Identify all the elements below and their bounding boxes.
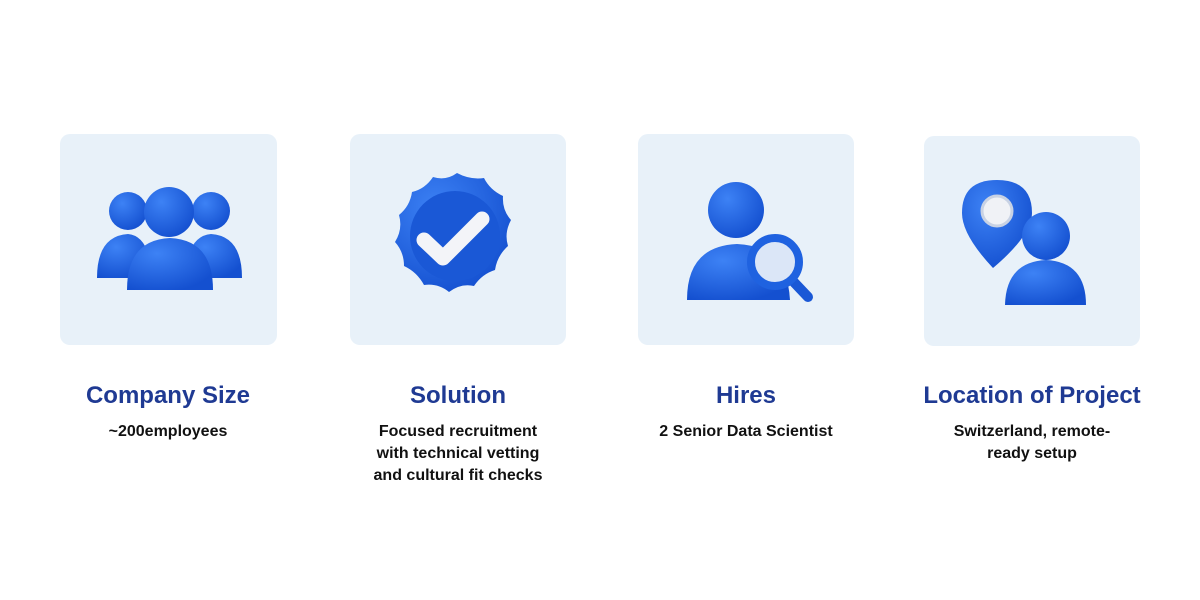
text: solution [374, 423, 542, 484]
text: location: Switzerland, remote- [954, 423, 1110, 440]
text: solution: and cultural fit checks [374, 467, 542, 484]
text: location: ready setup [987, 445, 1077, 462]
text: solution: with technical vetting [377, 445, 539, 462]
text: hires: 2 Senior Data Scientist [659, 423, 833, 440]
heading: hires: Hires [716, 382, 776, 409]
icon: location person [962, 180, 1086, 305]
card: company size [60, 134, 277, 345]
text: location [954, 423, 1110, 462]
heading: solution: Solution [410, 382, 506, 409]
card: solution [350, 134, 566, 345]
card: hires [638, 134, 854, 345]
text: company size: ~200employees [109, 423, 227, 440]
heading: company size: Company Size [86, 382, 250, 409]
icon: person search [687, 182, 808, 300]
card: location [924, 136, 1140, 346]
heading: location: Location of Project [923, 382, 1141, 409]
icon: badge check [395, 173, 511, 292]
icon: people [97, 187, 242, 290]
text: solution: Focused recruitment [379, 423, 537, 440]
